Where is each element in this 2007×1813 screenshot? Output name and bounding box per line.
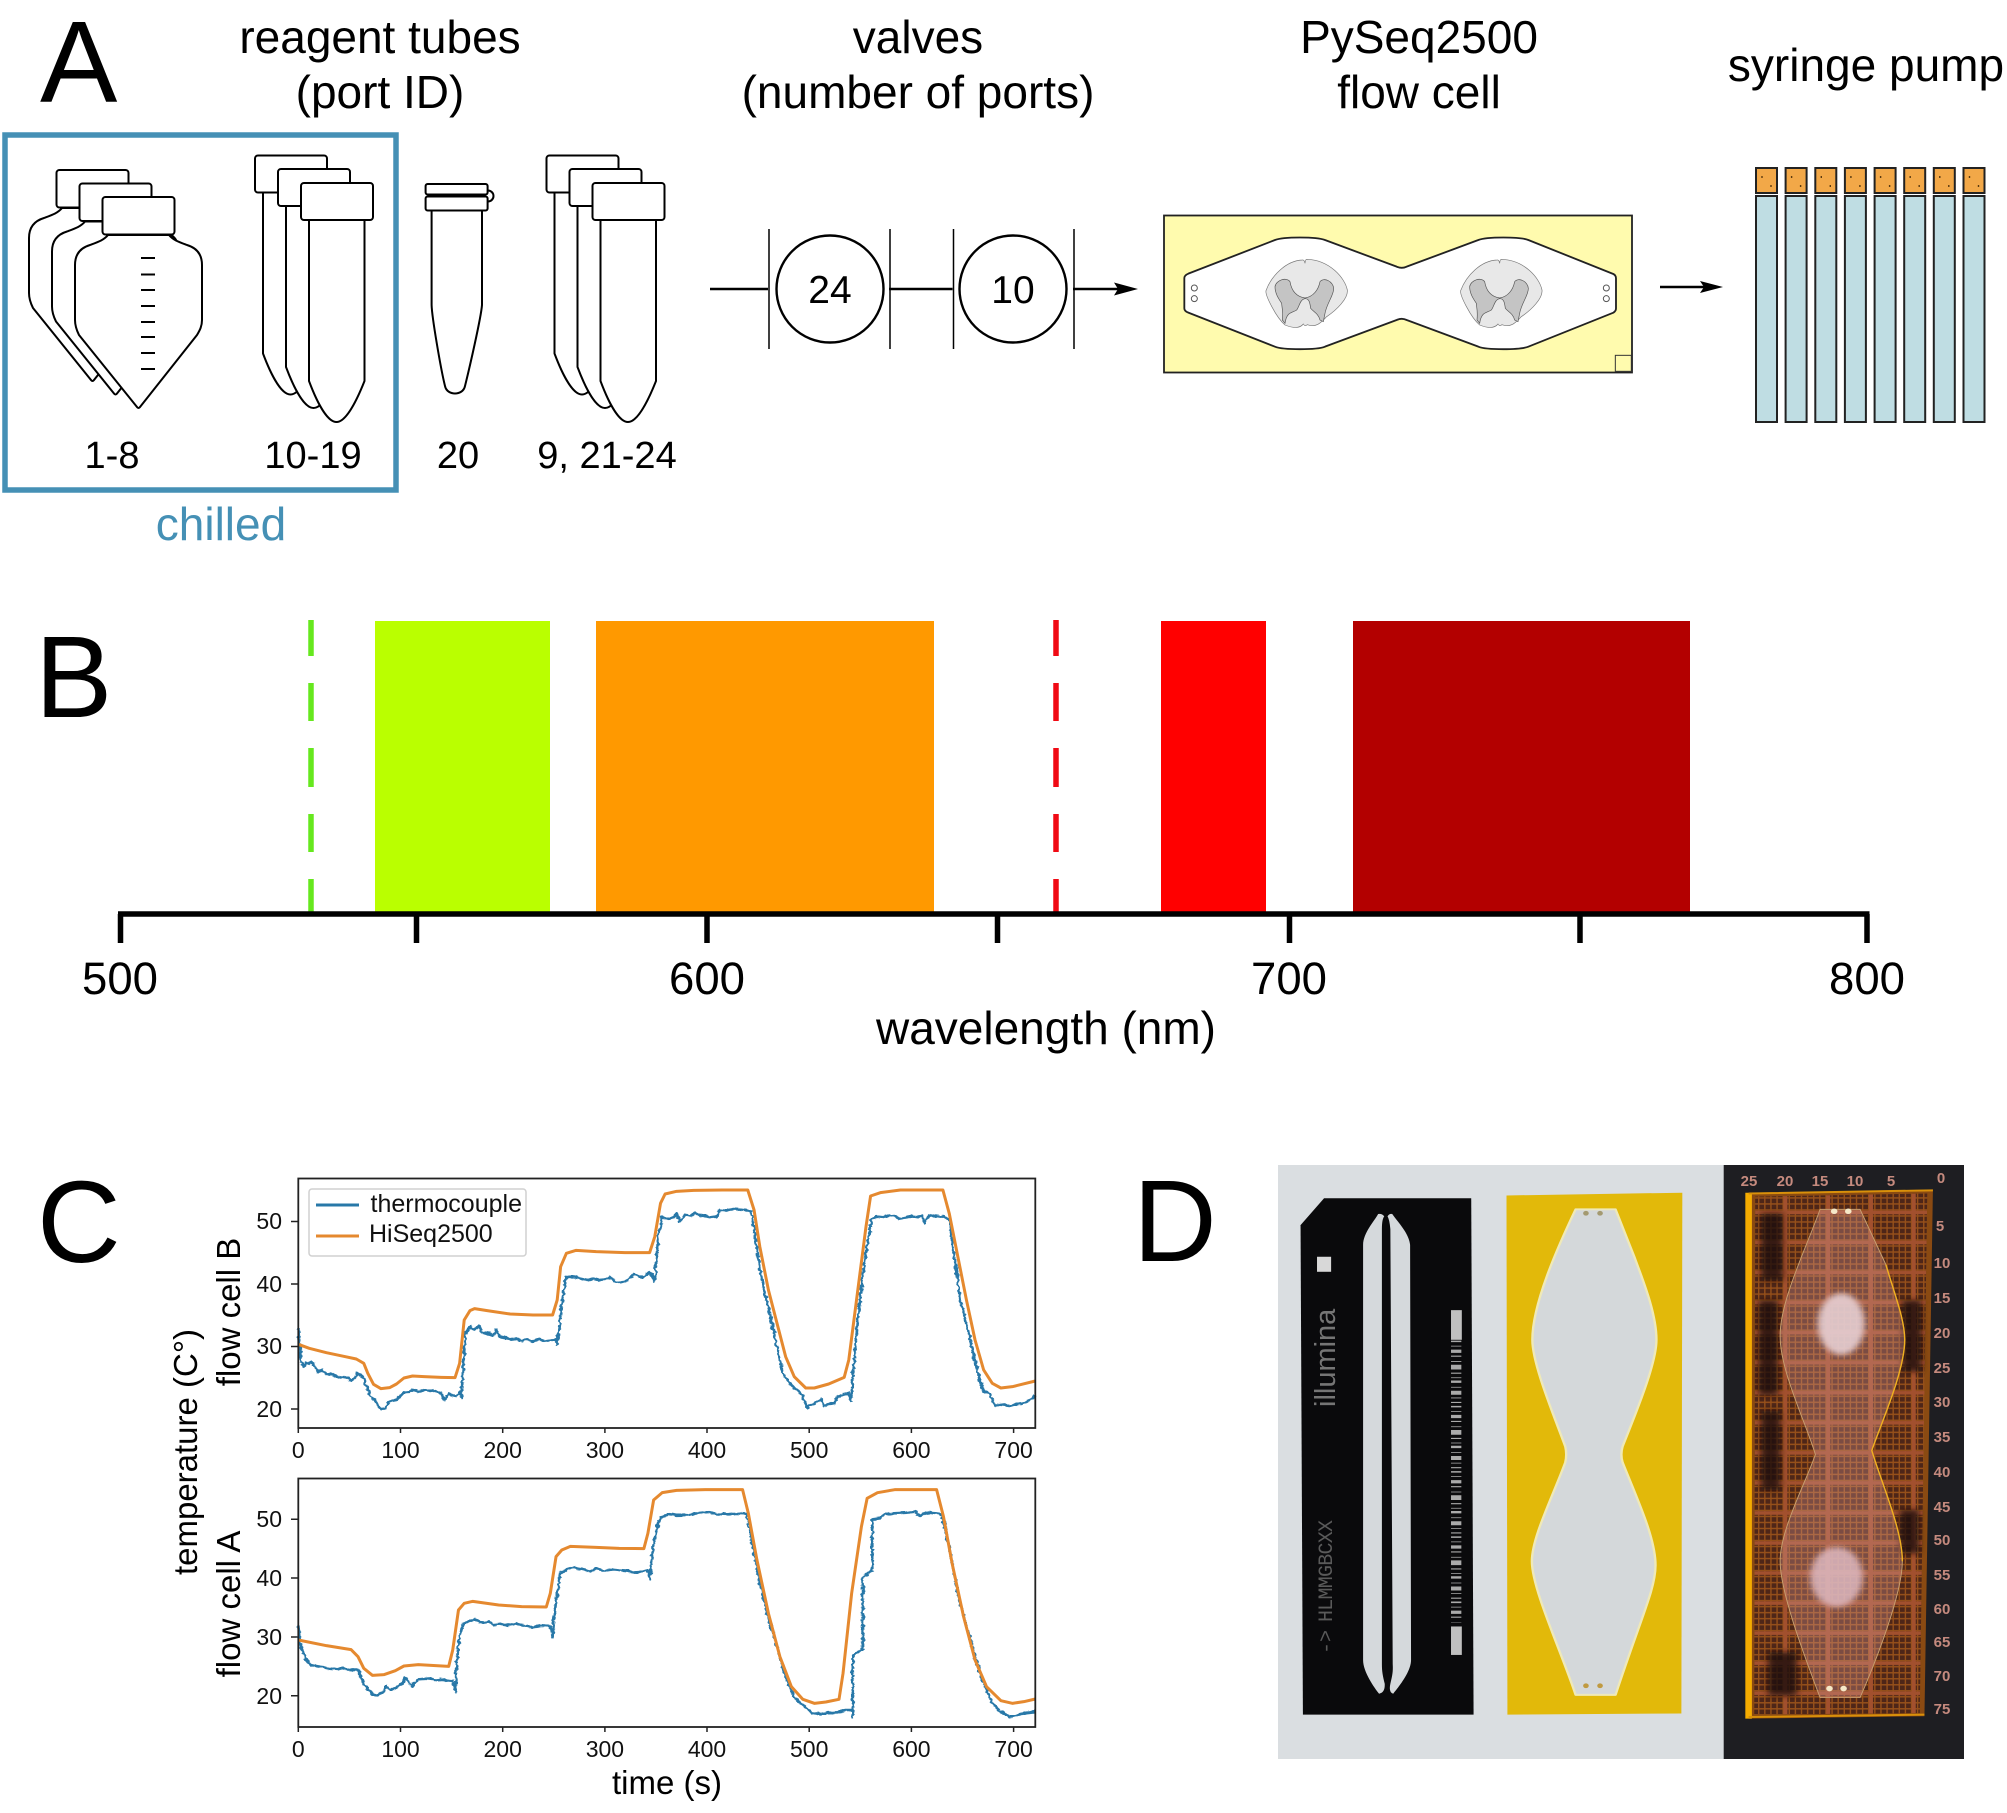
panel letter A: A [40,0,118,127]
port labels: 20 [437,435,479,477]
legend [309,1189,526,1256]
band: yellow-green filter [375,621,550,912]
photo text: illumina: illumina [1310,1308,1342,1407]
icon: conical tubes ports 9, 21-24 [546,156,664,422]
line chart: flow cell B: 20 [256,1396,282,1422]
line chart: flow cell B: 200 [484,1437,522,1463]
y axis title: flow cell B: flow cell B [210,1238,247,1386]
photo: Illumina black flow cell [1301,1198,1474,1715]
axis title: wavelength: wavelength (nm) [875,1002,1216,1054]
line chart: flow cell B: 600 [892,1437,931,1463]
line chart: flow cell A: 700 [994,1736,1033,1762]
y axis title: flow cell A: flow cell A [210,1531,247,1677]
heading: flow cell: flow cell [1337,66,1501,118]
photo background [1278,1165,1964,1759]
ruler numbers: vertical: 5 [1936,1218,1944,1235]
panel: A fluidics schematic [5,0,2004,550]
panel letter B: B [35,612,112,742]
ruler numbers: horizontal: 20 [1777,1173,1793,1190]
port labels: 9, 21-24 [537,435,677,477]
arrow: valves to flow cell [1114,282,1138,296]
line chart: flow cell A: 400 [688,1736,726,1762]
legend: HiSeq2500 [369,1220,493,1248]
heading: valves [742,11,1094,118]
heading: valves: valves [853,11,983,63]
line chart: flow cell A: 50 [256,1506,282,1532]
line chart: flow cell B: 500 [790,1437,828,1463]
syringe pump barrels [1756,168,1984,422]
band: dark red filter [1353,621,1690,912]
ruler numbers: vertical: 75 [1934,1701,1950,1718]
heading: valves: (number of ports) [742,66,1094,118]
line chart: flow cell B: 700 [994,1437,1033,1463]
port labels [85,435,677,477]
arrow: flow cell to pump [1660,281,1723,293]
line chart: flow cell A: 500 [790,1736,828,1762]
photo text: barcode id: HLMMGBCXX [1316,1520,1339,1622]
panel: B wavelength spectrum [35,612,1905,1054]
icon: flasks ports 1-8 [29,170,202,408]
icon: valves with ports: 24 [808,269,852,312]
wavelength axis: 500 [82,953,158,1004]
laser line: green dashed [308,620,314,912]
icon: microtube port 20 [426,184,494,394]
panel: C temperature charts [37,1157,1035,1801]
panel letter D: D [1133,1156,1217,1286]
icon: valves with ports: 10 [991,269,1035,312]
panel: D flow cell photographs [1133,1156,1964,1759]
ruler numbers: vertical: 55 [1934,1567,1950,1584]
x axis title: time: time (s) [612,1764,722,1801]
heading: flow cell: PySeq2500 [1300,11,1538,63]
ruler numbers: horizontal [1741,1170,1945,1190]
ruler numbers: vertical: 70 [1934,1668,1950,1685]
ruler numbers: horizontal: 0 [1937,1170,1945,1187]
line chart: flow cell A: 200 [484,1736,522,1762]
ruler numbers: vertical: 45 [1934,1499,1950,1516]
port labels: 10-19 [264,435,362,477]
line chart: flow cell A: 0 [292,1736,305,1762]
heading: reagent tubes: reagent tubes [239,11,521,63]
heading: reagent tubes [239,11,521,118]
flow cell diagram [1164,216,1632,372]
line chart: flow cell B: 400 [688,1437,726,1463]
ruler numbers: vertical: 50 [1934,1532,1950,1549]
band: red filter [1161,621,1266,912]
chilled label: chilled [156,498,286,550]
ruler numbers: vertical: 30 [1934,1394,1950,1411]
band: orange filter [596,621,934,912]
wavelength axis: 600 [669,953,745,1004]
line chart: flow cell A: 600 [892,1736,931,1762]
ruler numbers: vertical: 25 [1934,1360,1950,1377]
ruler numbers: horizontal: 25 [1741,1173,1757,1190]
port labels: 1-8 [85,435,139,477]
line chart: flow cell A: 100 [381,1736,420,1762]
ruler numbers: horizontal: 10 [1847,1173,1863,1190]
wavelength axis: 700 [1251,953,1327,1004]
line chart: flow cell A: 20 [256,1683,282,1709]
line chart: flow cell A: 30 [256,1624,282,1650]
line chart: flow cell B: 40 [256,1271,282,1297]
wavelength axis [82,914,1905,1004]
ruler numbers: vertical [1934,1218,1950,1718]
ruler numbers: horizontal: 5 [1887,1173,1895,1190]
heading: reagent tubes: (port ID) [296,66,464,118]
ruler numbers: vertical: 65 [1934,1634,1950,1651]
ruler numbers: vertical: 20 [1934,1325,1950,1342]
legend: thermocouple [370,1190,522,1218]
icon: conical tubes ports 10-19 [255,156,373,422]
photo: tissue mounted flow cell [1749,1190,1933,1719]
heading: syringe pump: syringe pump [1728,39,2004,91]
laser line: red dashed [1053,620,1059,912]
line chart: flow cell B: 30 [256,1333,282,1359]
icon: valves with ports [710,229,1118,349]
heading: flow cell [1300,11,1538,118]
ruler numbers: horizontal: 15 [1812,1173,1828,1190]
ruler numbers: vertical: 10 [1934,1255,1950,1272]
photo text: arrow: -> [1316,1630,1339,1654]
wavelength axis: 800 [1829,953,1905,1004]
ruler numbers: vertical: 15 [1934,1290,1950,1307]
line chart: flow cell B [256,1178,1035,1463]
ruler numbers: vertical: 40 [1934,1464,1950,1481]
line chart: flow cell A: 40 [256,1565,282,1591]
line chart: flow cell B: 100 [381,1437,420,1463]
line chart: flow cell A: 300 [586,1736,624,1762]
line chart: flow cell B: 300 [586,1437,624,1463]
photo: yellow gasket [1506,1193,1682,1715]
ruler numbers: vertical: 35 [1934,1429,1950,1446]
chilled box [5,135,396,490]
y axis title: temperature: temperature (C°) [167,1329,204,1575]
ruler numbers: vertical: 60 [1934,1601,1950,1618]
panel letter C: C [37,1157,121,1287]
line chart: flow cell A [256,1478,1035,1762]
line chart: flow cell B: 50 [256,1208,282,1234]
line chart: flow cell B: 0 [292,1437,305,1463]
